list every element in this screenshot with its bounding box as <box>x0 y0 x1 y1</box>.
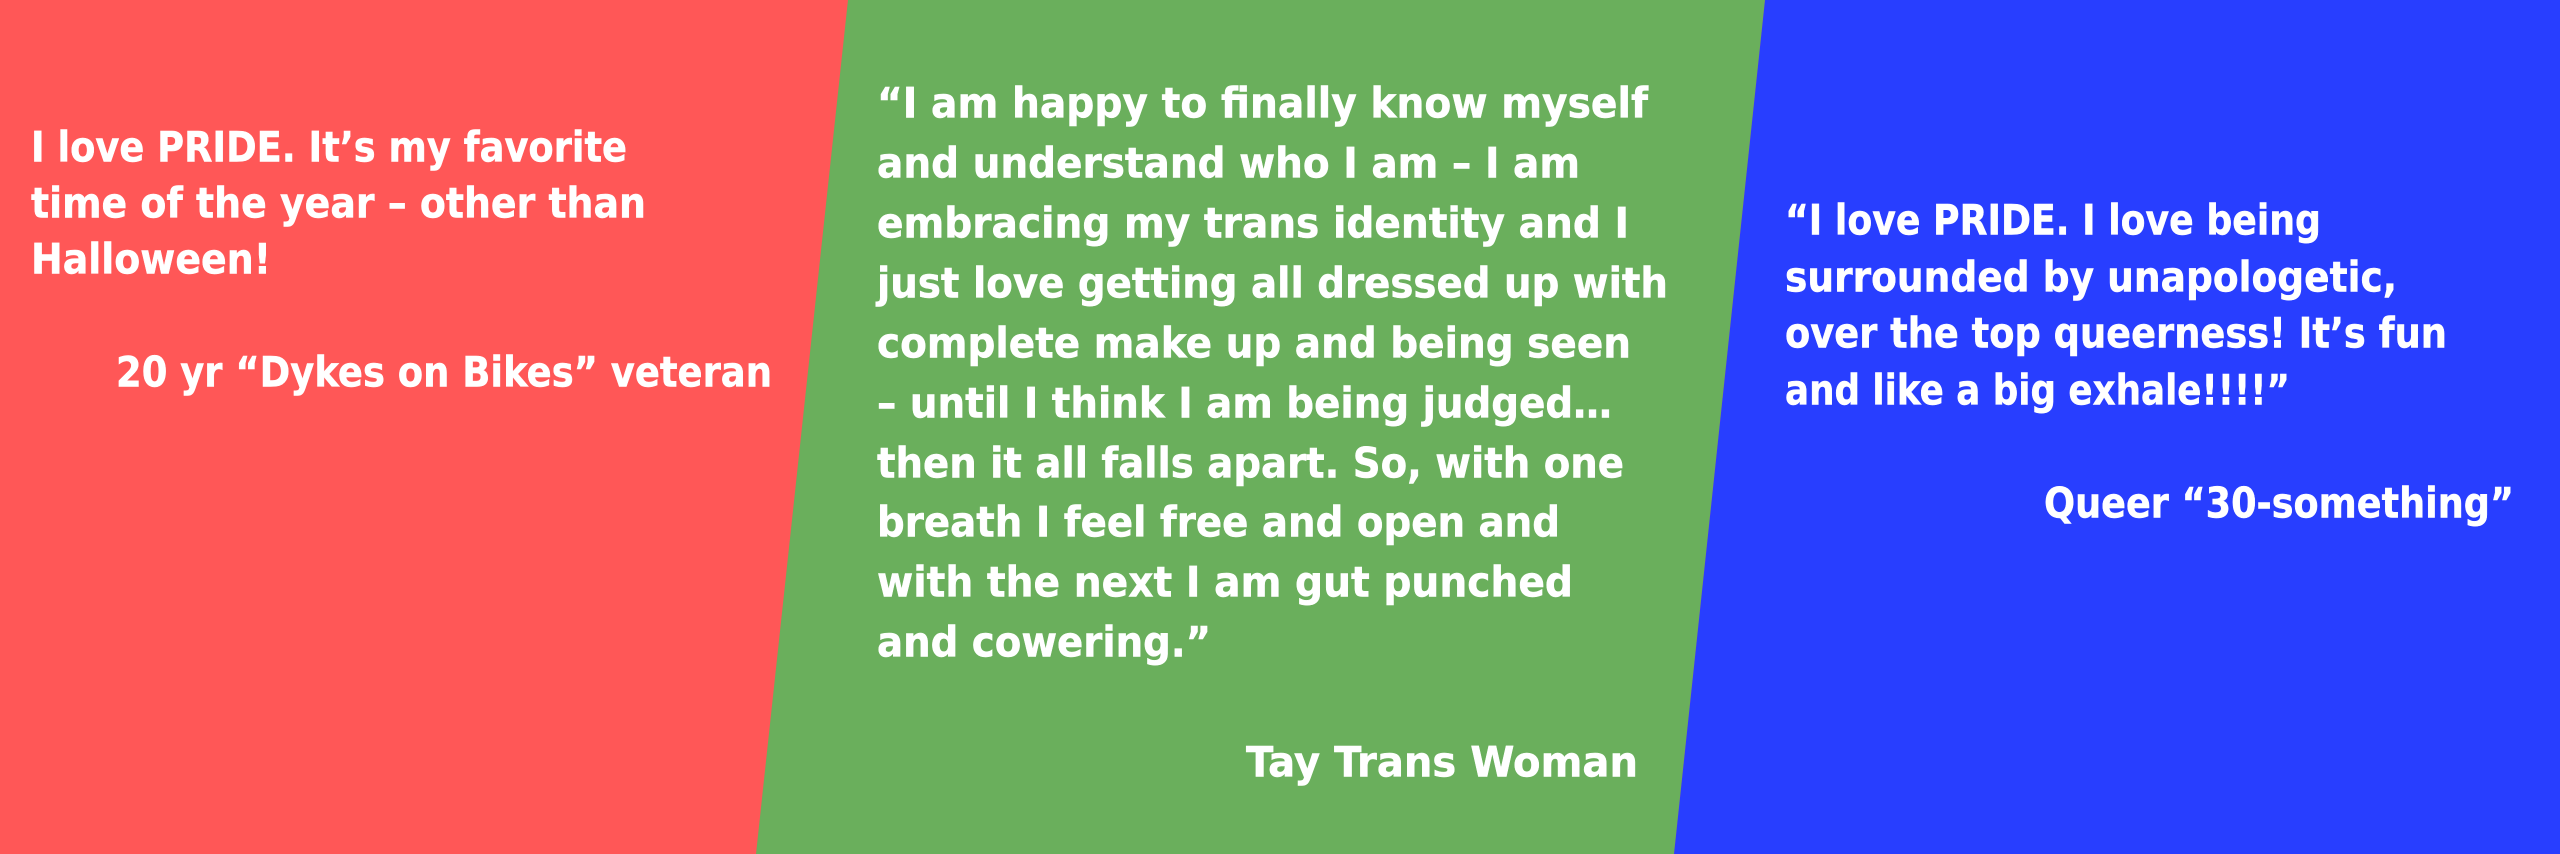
quote: red panel: time of the year – other than <box>31 178 646 228</box>
quote: blue panel <box>1785 196 2447 414</box>
attribution: Dykes on Bikes veteran: 20 yr “Dykes on Bikes” veteran <box>116 348 772 396</box>
quote: green panel: complete make up and being seen <box>877 318 1631 368</box>
quote: green panel: and cowering.” <box>877 618 1211 666</box>
panel: red background <box>0 0 848 854</box>
quote: green panel: just love getting all dressed up with <box>875 258 1668 308</box>
quote: green panel: – until I think I am being judged… <box>877 378 1612 428</box>
quote: red panel <box>31 122 646 284</box>
quote: green panel <box>875 78 1668 666</box>
quote: green panel: with the next I am gut punched <box>877 558 1573 606</box>
quote: blue panel: over the top queerness! It’s fun <box>1785 308 2447 358</box>
quote: red panel: Halloween! <box>31 234 271 284</box>
panel: green background <box>756 0 1765 854</box>
quote: red panel: I love PRIDE. It’s my favorite <box>31 122 627 172</box>
quote: green panel: embracing my trans identity and I <box>877 198 1629 248</box>
panel: blue background <box>1674 0 2560 854</box>
attribution: Tay Trans Woman: Tay Trans Woman <box>1246 738 1638 786</box>
quote: blue panel: and like a big exhale!!!!” <box>1785 366 2290 414</box>
quote: blue panel: surrounded by unapologetic, <box>1785 252 2397 302</box>
quote: green panel: then it all falls apart. So, with one <box>877 438 1624 488</box>
quote: green panel: “I am happy to finally know myself <box>877 78 1649 128</box>
quote: green panel: breath I feel free and open and <box>877 498 1560 546</box>
quote: blue panel: “I love PRIDE. I love being <box>1785 196 2321 244</box>
quote: green panel: and understand who I am – I am <box>877 138 1580 188</box>
